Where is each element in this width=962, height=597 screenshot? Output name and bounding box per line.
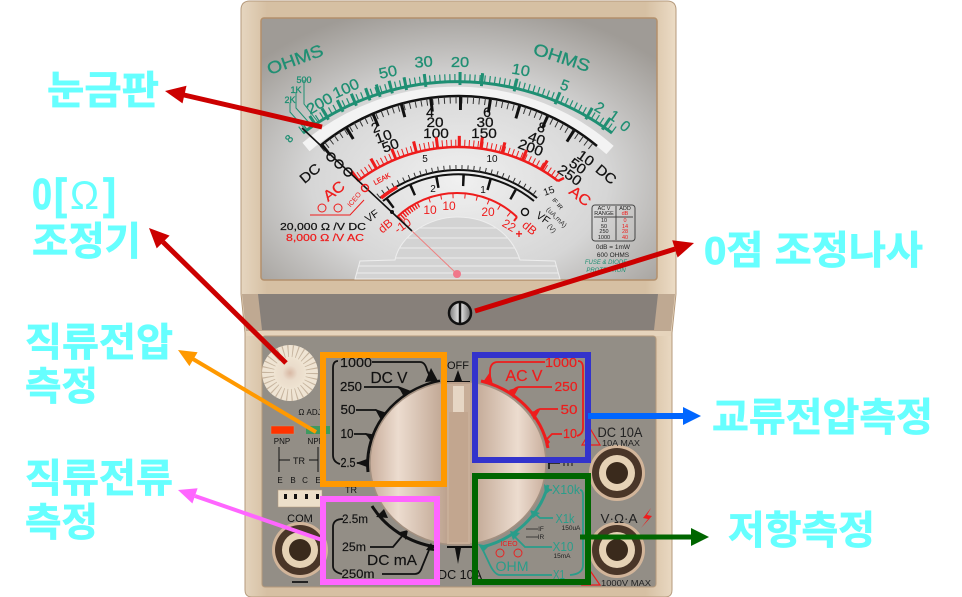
transistor test block: E	[277, 476, 283, 485]
DC labels: 4	[426, 104, 434, 120]
dB table: 1000	[598, 235, 610, 241]
scale end markers: ICEO	[347, 191, 363, 209]
DC mA range: 250m	[342, 569, 374, 581]
label: zero adjust screw: 0점 조정나사	[704, 230, 923, 273]
dB table: 600 OHMS	[597, 252, 630, 259]
arrow: resistance label	[580, 528, 709, 546]
OHM range: OHM	[496, 558, 528, 574]
dB table: 10	[601, 218, 607, 224]
arrow: DC current label	[178, 488, 325, 541]
OHM range: X1k	[556, 511, 575, 526]
label: zero ohm adjuster: [	[54, 170, 67, 219]
DC labels: 150	[471, 127, 497, 142]
dB table	[585, 205, 635, 274]
DC mA range	[333, 509, 435, 581]
arrow: AC voltage label	[588, 407, 701, 425]
icon: ohm adjust knob	[262, 345, 322, 417]
OHM range: IR	[538, 534, 545, 541]
arrow: ohm adjust label	[149, 228, 286, 363]
dB labels: -10	[392, 215, 414, 236]
green scale labels: 500	[296, 75, 312, 85]
dB labels: 22	[500, 216, 519, 235]
DC labels: 40	[526, 129, 547, 150]
highlight: DC voltage box	[323, 355, 444, 484]
DC labels: 10	[373, 127, 394, 148]
needle	[302, 128, 461, 278]
dB table: AC V	[598, 206, 611, 212]
sensitivity text	[280, 221, 366, 244]
label: zero ohm adjuster: 0	[32, 170, 52, 219]
dB table: 14	[622, 224, 628, 230]
dB table: 40	[622, 235, 628, 241]
DC labels: 250	[554, 162, 584, 189]
transistor test block: TR	[345, 485, 357, 495]
green scale labels: 8	[283, 133, 296, 145]
OHM range: IF	[538, 526, 544, 533]
dB table: PROTECTION	[586, 268, 626, 274]
green scale labels	[264, 39, 634, 145]
scale end markers: (V)	[545, 223, 557, 235]
AC V range: 50	[560, 402, 578, 417]
icon: DC 10A jack	[589, 445, 645, 501]
arrow: zero screw label	[475, 240, 694, 311]
icon: COM jack	[272, 522, 328, 583]
meter body	[241, 1, 676, 597]
label: zero ohm adjuster: Ω	[70, 174, 99, 218]
OFF and DC 10A markers: OFF	[447, 360, 469, 372]
AC labels: AC	[566, 183, 594, 210]
transistor test block: C	[302, 476, 308, 485]
AC V range	[483, 355, 583, 447]
DC labels: 200	[516, 137, 545, 160]
dB labels: 20	[481, 205, 495, 219]
mirror dome	[354, 218, 561, 280]
jack labels: DC 10A	[598, 424, 643, 440]
DC labels	[297, 104, 619, 189]
AC V range: 250	[554, 379, 578, 394]
dB labels: 10	[423, 203, 437, 217]
OHM range: X1	[553, 567, 565, 582]
transistor test block: COM	[287, 513, 313, 525]
DC black scale	[320, 96, 597, 151]
dB table: FUSE & DIODE	[585, 260, 628, 266]
DC labels: DC	[592, 162, 619, 188]
panel: scale dial	[261, 18, 657, 280]
AC labels: AC	[320, 178, 348, 205]
DC labels: 6	[483, 104, 491, 120]
label: DC voltage measurement: 직류전압	[25, 322, 173, 365]
second scale labels: 5	[422, 154, 428, 165]
label: AC voltage measurement: 교류전압측정	[712, 397, 933, 440]
highlight: resistance box	[475, 476, 588, 582]
scale end markers: VF	[534, 210, 552, 228]
green scale labels: 5	[558, 76, 571, 95]
green scale labels: 100	[330, 76, 362, 102]
AC V range: 1000	[545, 355, 577, 370]
green scale labels: 1K	[290, 85, 302, 95]
scale end markers	[310, 184, 568, 235]
second scale labels: 15	[542, 184, 557, 199]
DC labels: 20	[426, 116, 444, 131]
DC labels: DC	[297, 161, 324, 187]
dB labels: 10	[442, 199, 456, 213]
dB table: 250	[599, 229, 609, 235]
DC labels: 8	[535, 118, 548, 136]
scale end markers: IF IR	[550, 197, 564, 212]
scale end markers: (uA,mA)	[545, 206, 568, 229]
icon: V ohm A jack	[589, 522, 645, 578]
green scale labels: OHMS	[531, 39, 593, 76]
AC red scale	[354, 142, 564, 181]
second scale labels: 2	[430, 184, 436, 195]
label: zero ohm adjuster: ]	[103, 170, 116, 219]
DC V range: DC V	[370, 370, 408, 387]
OFF and DC 10A markers: DC 10A	[438, 567, 482, 582]
highlight: DC current box	[323, 499, 437, 582]
DC labels: 50	[566, 156, 589, 178]
dB table: ADD	[619, 206, 631, 212]
OHM range: 15mA	[554, 553, 571, 560]
arrow: scale label	[165, 86, 322, 127]
green scale labels: 10	[510, 61, 531, 80]
label: DC current measurement: 측정	[25, 502, 98, 545]
transistor test block: E	[315, 476, 321, 485]
jack labels: 1000V MAX	[601, 579, 652, 588]
DC labels: 2	[369, 118, 382, 136]
green scale labels: 50	[377, 63, 399, 83]
dB labels	[375, 199, 540, 241]
DC V range: 2.5	[340, 455, 356, 470]
DC labels: 10	[574, 148, 597, 170]
jack labels: V·Ω·A	[600, 511, 638, 526]
jack labels: 10A MAX	[602, 439, 641, 448]
DC mA range: 2.5m	[342, 514, 368, 526]
green scale labels: 20	[451, 55, 469, 71]
label: DC voltage measurement	[25, 322, 173, 409]
AC V range: 10	[563, 426, 577, 441]
DC V range: 250	[340, 379, 362, 394]
OFF and DC 10A markers	[438, 360, 572, 582]
dB table: 50	[601, 224, 607, 230]
green scale labels: 2	[591, 99, 607, 118]
selector dial arcs	[368, 381, 548, 547]
second scale labels	[422, 154, 557, 199]
AC V range: AC V	[506, 368, 543, 385]
OHM range: X10k	[552, 482, 580, 497]
DC labels: 50	[380, 136, 401, 157]
panel: zero adjust band	[258, 294, 658, 330]
DC V range: 1000	[340, 355, 372, 370]
transistor test block	[271, 426, 357, 525]
label: resistance measurement: 저항측정	[728, 510, 875, 553]
transistor test block: TR	[293, 456, 305, 466]
dB table: 0	[623, 218, 627, 224]
dB table: 0dB = 1mW	[596, 244, 631, 251]
dB labels: dB	[519, 218, 540, 238]
green scale labels: 0	[616, 117, 634, 136]
sensitivity text: 8,000 Ω /V AC	[286, 232, 364, 244]
green scale labels: OHMS	[264, 40, 326, 79]
green ohms scale	[290, 78, 614, 133]
OHM range: ICEO	[500, 541, 518, 548]
transistor test block: NPN	[308, 437, 325, 446]
icon: zero adjust screw	[449, 302, 471, 324]
DC V range: 10	[340, 426, 354, 441]
DC labels: 100	[423, 127, 449, 142]
green scale labels: 200	[304, 90, 336, 118]
green scale labels: 1	[605, 107, 622, 126]
highlight: AC voltage box	[475, 355, 588, 460]
label: DC voltage measurement: 측정	[25, 366, 98, 409]
jack labels	[582, 424, 652, 588]
transistor test block: PNP	[274, 437, 290, 446]
OHM range: X10	[552, 539, 574, 554]
transistor test block: B	[290, 476, 296, 485]
AC labels: LEAK	[373, 172, 392, 187]
DC mA range: DC mA	[367, 552, 417, 569]
label: DC current measurement: 직류전류	[25, 458, 173, 501]
OHM range: 150uA	[562, 525, 581, 532]
DC V range	[333, 355, 438, 470]
OHM range	[478, 482, 583, 582]
dB red scale	[397, 193, 517, 221]
label: zero ohm adjuster	[32, 170, 141, 264]
dB labels: +	[515, 227, 523, 241]
arrow: DC voltage label	[178, 350, 316, 432]
DC V range: 50	[340, 402, 356, 417]
scale end markers: VF	[363, 207, 382, 225]
DC mA range: 25m	[342, 542, 366, 554]
label: DC current measurement	[25, 458, 173, 545]
dB table: RANGE	[594, 211, 614, 217]
label: zero ohm adjuster: 조정기	[32, 221, 141, 264]
second scale labels: 1	[480, 185, 486, 196]
panel: range selector	[262, 336, 656, 588]
white mirror band	[306, 92, 610, 150]
dB labels: dB	[375, 216, 396, 236]
green scale labels: 2K	[284, 95, 296, 105]
label: scale plate: 눈금판	[47, 70, 159, 113]
icon: ohm adjust knob: Ω ADJ	[298, 408, 322, 417]
green scale labels: 30	[414, 54, 434, 72]
AC labels	[320, 172, 594, 210]
DC labels: 30	[476, 116, 494, 131]
second black scale	[378, 168, 539, 206]
dB table: dB	[622, 211, 629, 217]
sensitivity text: 20,000 Ω /V DC	[280, 221, 366, 233]
second scale labels: 10	[486, 154, 498, 165]
dB table: 28	[622, 229, 628, 235]
icon: selector knob	[370, 381, 546, 545]
